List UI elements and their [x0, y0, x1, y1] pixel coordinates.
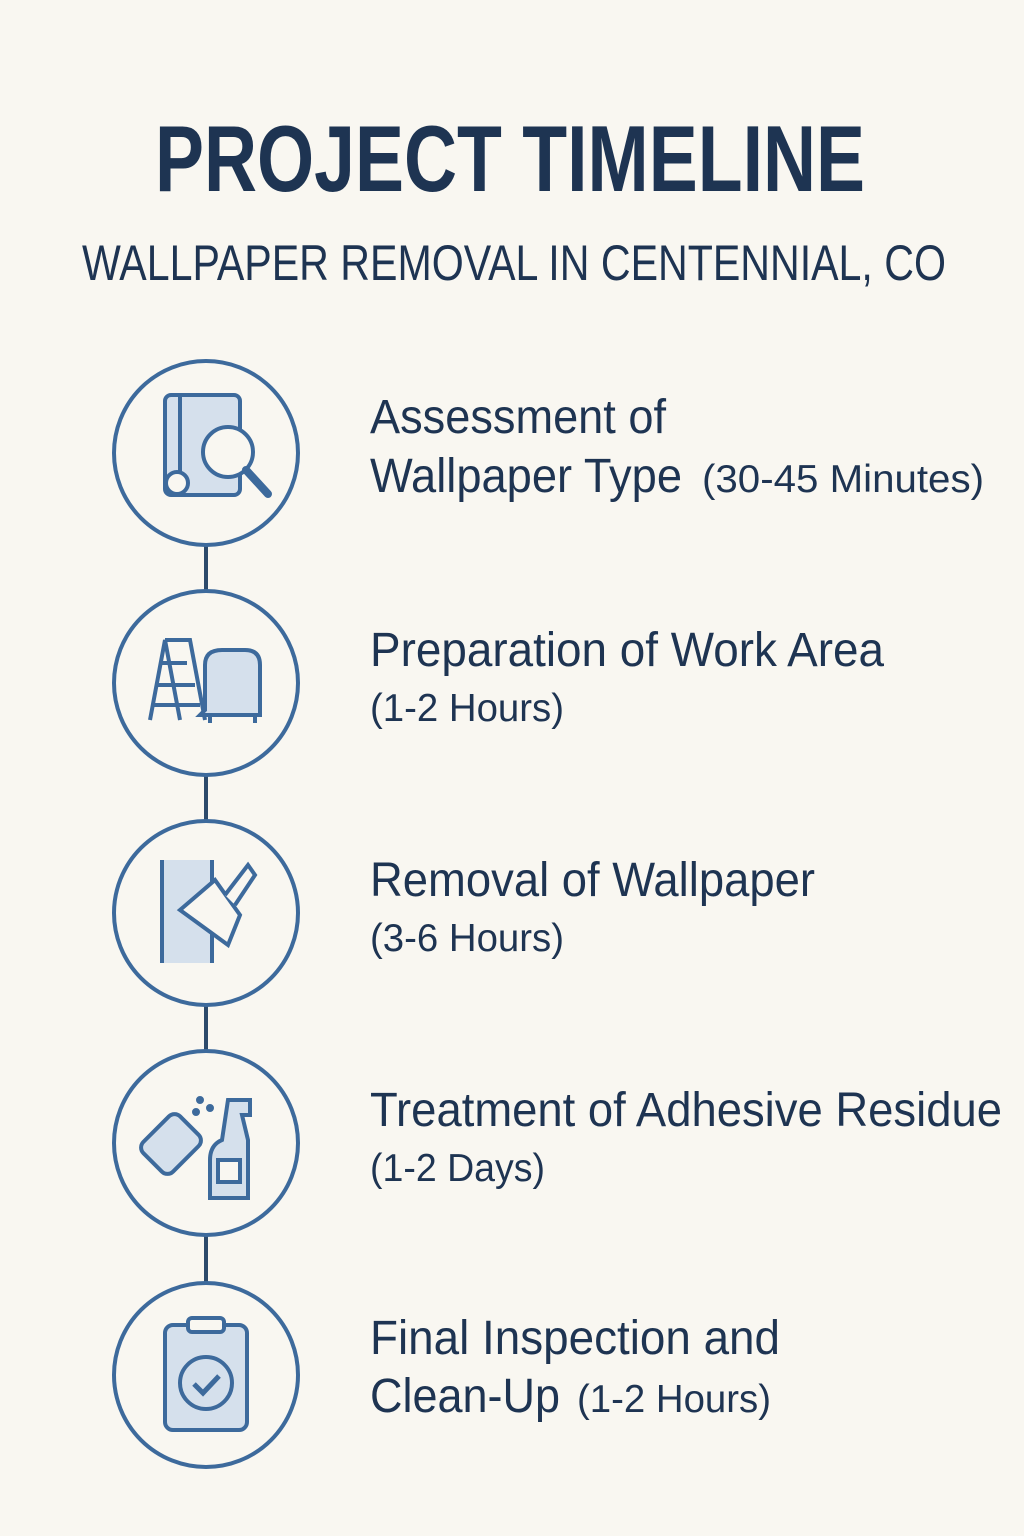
- step 4: adhesive: (1-2 Days): [370, 1147, 545, 1190]
- step 1 text: Assessment of: [370, 391, 667, 444]
- step 5: final inspection: Clean-Up: [370, 1370, 560, 1423]
- step 4 text: Treatment of Adhesive Residue: [370, 1084, 1002, 1137]
- step 1: assessment: (30-45 Minutes): [702, 458, 984, 501]
- icon: scraper on wall: [114, 821, 298, 1005]
- icon: ladder and covered chair: [114, 591, 298, 775]
- step 5 text: Final Inspection and: [370, 1312, 780, 1365]
- step 3: removal: (3-6 Hours): [370, 917, 564, 960]
- timeline connector: [204, 545, 208, 1283]
- step 3 text: Removal of Wallpaper: [370, 854, 815, 907]
- icon: sponge and spray bottle: [114, 1051, 298, 1235]
- step 1: assessment: Wallpaper Type: [370, 450, 682, 503]
- step 2: preparation: (1-2 Hours): [370, 687, 564, 730]
- step 5: final inspection: [114, 1283, 780, 1467]
- step 3: removal: [114, 821, 815, 1005]
- icon: clipboard with check: [114, 1283, 298, 1467]
- step 1: assessment: [114, 361, 984, 545]
- step 2: preparation: [114, 591, 884, 775]
- step 2 text: Preparation of Work Area: [370, 624, 884, 677]
- step 4: adhesive: [114, 1051, 1002, 1235]
- step 5: final inspection: (1-2 Hours): [577, 1378, 771, 1421]
- icon: wallpaper roll with magnifier: [114, 361, 298, 545]
